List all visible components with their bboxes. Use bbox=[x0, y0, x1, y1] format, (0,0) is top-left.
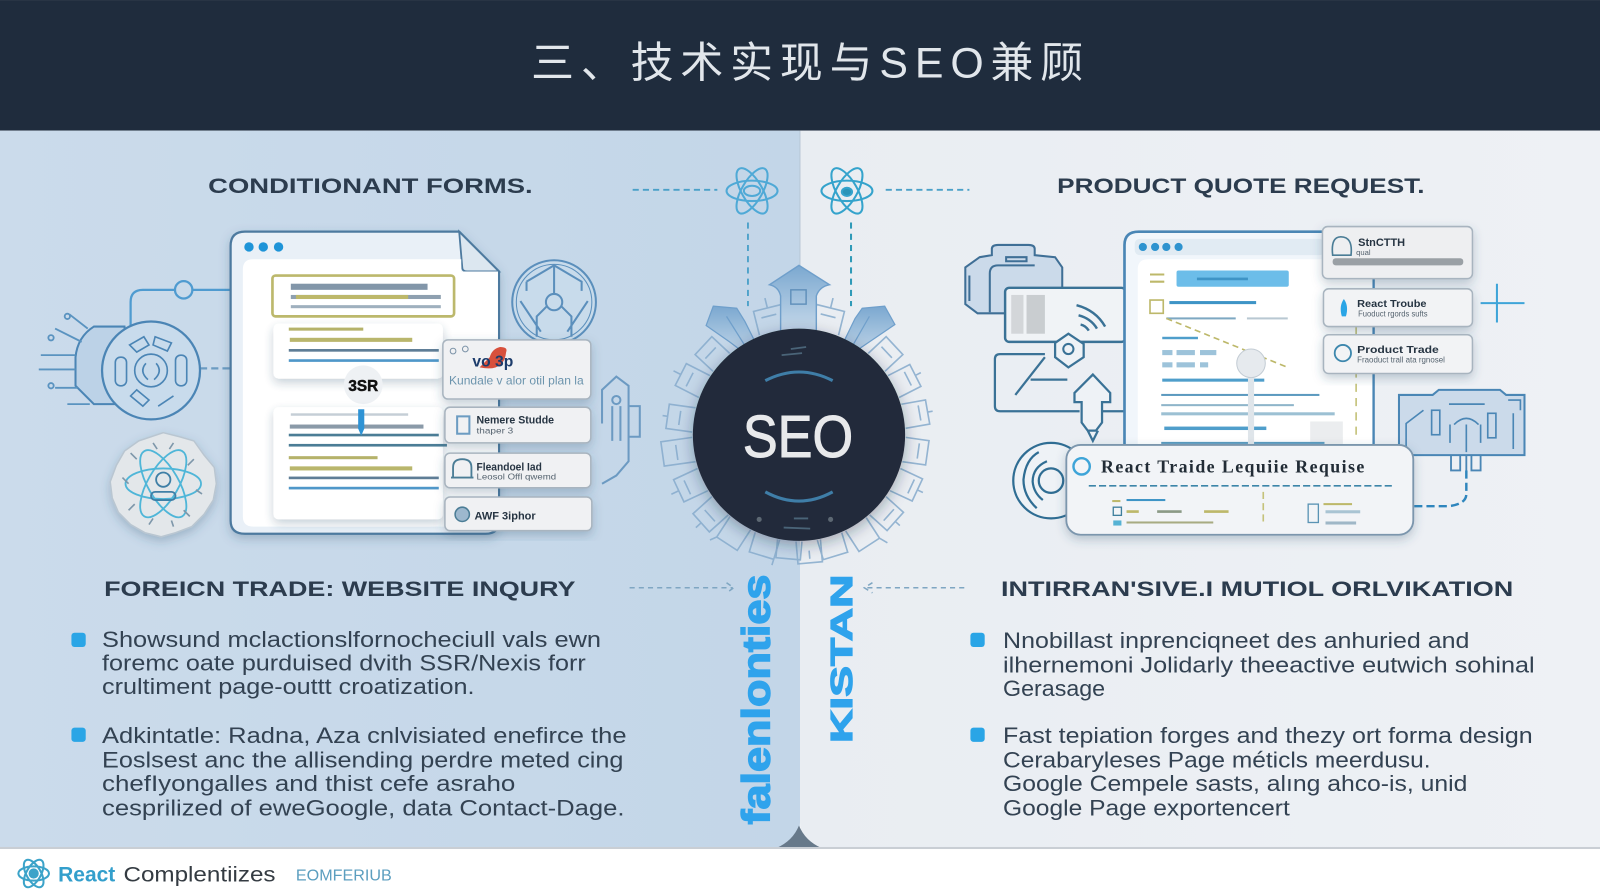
footer tag: EOMFERIUB bbox=[296, 868, 392, 885]
icon: plus bbox=[1481, 284, 1524, 322]
bullet list: right second: Google Page exportencert bbox=[1003, 795, 1291, 820]
center tower bbox=[769, 265, 830, 332]
bullet list: left second: Adkintatle: Radna, Aza cnlvisiated enefirce the bbox=[102, 723, 627, 748]
bullet list: right first bbox=[970, 628, 1535, 701]
diagram: right form illustration bbox=[965, 227, 1524, 535]
icon: frame with diagonal bbox=[995, 354, 1124, 411]
SSR badge bbox=[344, 365, 383, 404]
side card: fleando: Leosol Offl qwemd bbox=[477, 472, 556, 482]
side card: plan: vo 3p bbox=[472, 353, 513, 370]
diagram: left form illustration bbox=[39, 232, 640, 537]
footer brand: React bbox=[58, 863, 115, 887]
bullet list: left first: crultiment page-outtt croatization. bbox=[102, 674, 474, 699]
bullet list: right first: Gerasage bbox=[1003, 676, 1105, 701]
side card: status bbox=[1322, 227, 1472, 279]
disc dots bbox=[757, 517, 833, 522]
icon: left react atom bbox=[727, 164, 778, 218]
vertical label right: KISTAN bbox=[825, 575, 859, 743]
title: 三、技术实现与SEO兼顾 bbox=[531, 40, 1083, 88]
side card: plan bbox=[443, 340, 591, 399]
bullet list: left second: cesprilized of eweGoogle, data Contact-Dage. bbox=[102, 795, 624, 820]
disc arcs bbox=[765, 347, 833, 529]
window dots bbox=[1139, 243, 1183, 251]
inner page bbox=[1138, 259, 1372, 454]
icon: footer react atom bbox=[18, 857, 49, 890]
icon: camera bbox=[965, 245, 1062, 313]
icon: circuit chip bbox=[1399, 390, 1524, 470]
bullet list: left second: chefIyongalles and thist cefe asraho bbox=[102, 771, 515, 796]
heading: product quote request: PRODUCT QUOTE REQUEST. bbox=[1057, 174, 1424, 198]
slider pin bbox=[1237, 349, 1265, 449]
connector wires bbox=[131, 281, 233, 368]
big request card: React Traide Lequiie Requise bbox=[1101, 456, 1364, 476]
connector: right horizontal dashes bbox=[886, 189, 969, 191]
page fold bbox=[459, 232, 499, 271]
bullet list: right second bbox=[970, 723, 1533, 820]
bullet list: right first: Nnobillast inprenciqneet des anhuried and bbox=[1003, 628, 1469, 653]
side card: status: StnCTTH bbox=[1358, 237, 1405, 249]
document window bbox=[231, 232, 499, 534]
icon: pin eye bbox=[1063, 344, 1073, 354]
side card: studio: thaper 3 bbox=[477, 426, 513, 436]
heading: mutual cultivation: INTIRRAN'SIVE.I MUTIOL ORLVIKATION bbox=[1001, 577, 1513, 601]
center notch bbox=[777, 826, 821, 848]
inner page bbox=[243, 259, 498, 527]
vertical label left: falenlonties bbox=[735, 575, 778, 825]
panel: right background bbox=[800, 131, 1600, 849]
icon: location pin bbox=[1055, 334, 1084, 367]
icon: hex circle bbox=[512, 260, 596, 344]
side card: react trade bbox=[1323, 289, 1472, 327]
connector: right vertical dashes bbox=[850, 222, 852, 306]
side card: fleando: Fleandoel Iad bbox=[477, 461, 542, 473]
form card two bbox=[273, 407, 447, 519]
bullet list: right second: Google Cempele sasts, alıng ahco-is, unid bbox=[1003, 771, 1467, 796]
footer rule bbox=[0, 847, 1600, 849]
building blocks bbox=[661, 295, 935, 565]
arrow: right inbound bbox=[864, 583, 964, 593]
side card: react trade: Fuoduct rgords sufts bbox=[1358, 309, 1428, 318]
side card: studio: Nemere Studde bbox=[477, 415, 554, 427]
footer bbox=[18, 857, 392, 890]
bullet list: left second bbox=[71, 723, 627, 820]
icon: card with wifi bbox=[1005, 288, 1126, 342]
bullet list: left first bbox=[71, 627, 601, 699]
icon: circuit disc bbox=[39, 314, 200, 419]
icon: round gear bbox=[1013, 443, 1089, 518]
arrow: left inbound bbox=[630, 583, 734, 593]
dashed link bbox=[1413, 470, 1466, 506]
bullet list: right first: ilhernemoni Jolidarly theeactive eutwich sohinal bbox=[1003, 652, 1535, 677]
heading: website inquiry: FOREICN TRADE: WEBSITE INQURY bbox=[104, 577, 576, 601]
side card: fleando bbox=[445, 453, 591, 488]
side card: AWF bbox=[445, 497, 592, 531]
side card: product trade: Fraoduct trall ata rgnosel bbox=[1357, 355, 1445, 364]
left tower bbox=[706, 306, 760, 357]
side card: plan: Kundale v alor otil plan la bbox=[449, 374, 584, 388]
seo hub ring bbox=[661, 265, 935, 565]
footer product name: Complentiizes bbox=[123, 863, 276, 887]
side card: status: qual bbox=[1356, 248, 1371, 257]
icon: atom gear bbox=[110, 433, 216, 537]
icon: right react atom bbox=[821, 164, 872, 218]
SSR badge: 3SR bbox=[348, 378, 378, 395]
form card one bbox=[273, 324, 443, 379]
side card: studio bbox=[445, 407, 591, 443]
big request card bbox=[1066, 445, 1413, 535]
panel seam bbox=[799, 131, 801, 337]
seo label: SEO bbox=[743, 403, 853, 470]
panel: left background bbox=[0, 131, 800, 849]
seo disc bbox=[693, 329, 905, 541]
icon: arrow house bbox=[1074, 375, 1110, 441]
form content lines bbox=[1150, 270, 1373, 445]
bullet list: left first: foremc oate purduised dvith SSR/Nexis forr bbox=[102, 650, 586, 675]
bullet list: right second: Fast tepiation forges and thezy ort forma design bbox=[1003, 723, 1533, 748]
bullet list: right second: Cerabaryleses Page méticls meerdusu. bbox=[1003, 747, 1431, 772]
side card: AWF: AWF 3iphor bbox=[474, 510, 536, 522]
side card: product trade: Product Trade bbox=[1357, 345, 1439, 356]
heading: conditional forms: CONDITIONANT FORMS. bbox=[208, 174, 533, 198]
window dots bbox=[244, 242, 283, 252]
side card: react trade: React Troube bbox=[1357, 299, 1427, 310]
icon: shield outline bbox=[602, 377, 640, 484]
address bar bbox=[1135, 239, 1324, 255]
browser window bbox=[1124, 232, 1373, 454]
bullet list: left second: Eoslsest anc the allisending perdre meted cing bbox=[102, 747, 623, 772]
right tower bbox=[839, 306, 895, 357]
side card: product trade bbox=[1323, 335, 1472, 374]
connector: left horizontal dashes bbox=[633, 189, 717, 191]
header band bbox=[0, 0, 1600, 131]
highlighted field bbox=[272, 276, 454, 316]
connector: left vertical dashes bbox=[747, 222, 749, 306]
bullet list: left first: Showsund mclactionslfornocheciull vals ewn bbox=[102, 627, 601, 652]
